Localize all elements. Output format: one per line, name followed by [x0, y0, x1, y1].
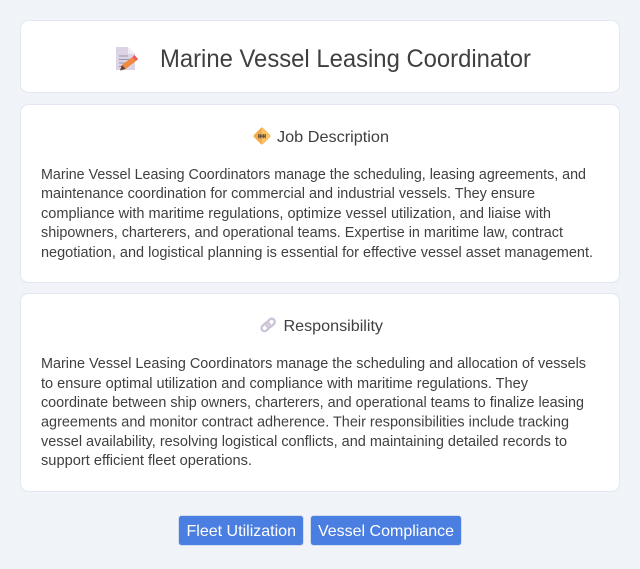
text block: responsibility: agreements and monitor contract adherence. Their responsibilities include tracking: [41, 414, 569, 430]
text block: job description: [41, 167, 593, 261]
icon: document with pencil: [116, 47, 138, 70]
text block: responsibility: vessel availability, resolving logistical conflicts, and maintaining detailed records to: [41, 434, 567, 450]
tag: fleet utilization: [178, 516, 304, 546]
tag: vessel compliance: [310, 516, 462, 546]
heading: responsibility: Responsibility: [284, 318, 383, 335]
text block: job description: Marine Vessel Leasing Coordinators manage the scheduling, leasing agreements, and: [41, 167, 586, 183]
panel: job description: [20, 104, 620, 282]
text block: responsibility: coordinate between ship owners, charterers, and operational teams to finalize leasing: [41, 395, 584, 411]
text block: responsibility: to ensure optimal utilization and compliance with maritime regulations. They: [41, 376, 529, 392]
title: Marine Vessel Leasing Coordinator: [160, 45, 531, 73]
panel: title card: [20, 20, 620, 92]
text block: responsibility: Marine Vessel Leasing Coordinators manage the scheduling and allocation of vessels: [41, 356, 586, 372]
tag: fleet utilization: Fleet Utilization: [186, 523, 296, 540]
text block: job description: compliance with maritime regulations, optimize vessel utilization, and liaise with: [41, 206, 551, 222]
icon: diamond road sign: [253, 127, 271, 145]
tag: vessel compliance: Vessel Compliance: [318, 523, 454, 540]
text block: responsibility: [41, 356, 586, 469]
text block: job description: negotiation, and logistical planning is essential for effective vessel asset management.: [41, 245, 593, 261]
icon: chain link: [260, 317, 276, 332]
text block: job description: maintenance coordination for commercial and industrial vessels. They ensure: [41, 186, 535, 202]
text block: job description: shipowners, charterers, and operational teams. Expertise in maritime law, contract: [41, 225, 563, 241]
panel: responsibility: [20, 294, 620, 492]
heading: job description: Job Description: [277, 129, 389, 146]
text block: responsibility: support efficient fleet operations.: [41, 453, 252, 469]
